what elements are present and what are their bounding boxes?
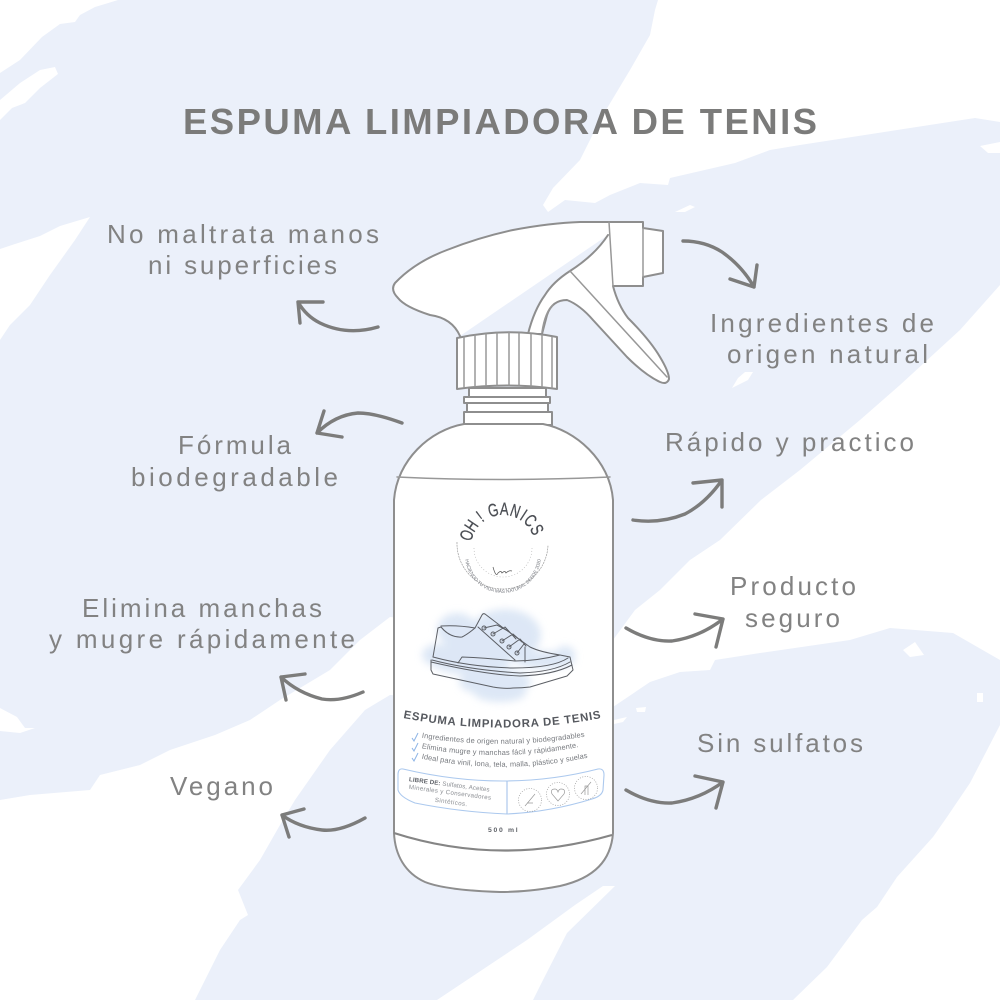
label: fórmula biodegradable: [131, 430, 338, 492]
logo: oh!ganics: !: [473, 508, 488, 526]
libre de box: LIBRE DE: Sulfatos, Aceites: [409, 777, 490, 792]
label: no maltrata manos: [107, 219, 379, 280]
label: producto seguro: [730, 571, 856, 633]
arrow: sin sulfatos: [626, 776, 723, 808]
arrow: no maltrata: [298, 302, 378, 331]
shoe illustration: [431, 614, 573, 688]
label: rápido y practico: Rápido y practico: [665, 427, 914, 457]
logo: oh!ganics: N: [507, 501, 523, 523]
screw cap: [457, 332, 557, 389]
bottle neck: [464, 388, 552, 425]
certification icons: [518, 776, 598, 812]
bottle body: [394, 424, 613, 892]
benefit checklist: Ideal para vinil, lona, tela, malla, plástico y suelas: [422, 754, 588, 768]
benefit checklist: Ingredientes de origen natural y biodegradables: [422, 732, 584, 746]
arrow: rápido: [633, 480, 722, 521]
label: vegano: Vegano: [170, 771, 273, 801]
arrow: vegano: [282, 809, 365, 837]
label: no maltrata manos: No maltrata manos: [107, 219, 379, 249]
label: elimina manchas: [49, 593, 355, 654]
arrow: producto: [626, 614, 723, 647]
label: producto seguro: seguro: [745, 603, 840, 633]
label: ingredientes de origen natural: Ingredientes de: [710, 308, 934, 338]
label: sin sulfatos: Sin sulfatos: [697, 728, 863, 758]
label: no maltrata manos: ni superficies: [148, 250, 337, 280]
logo: oh!ganics: G: [486, 500, 501, 522]
libre de box: Minerales y Conservadores: [409, 784, 491, 800]
product name: ESPUMA LIMPIADORA DE TENIS: [404, 710, 600, 728]
label: fórmula biodegradable: biodegradable: [131, 462, 338, 492]
libre de box: [398, 768, 604, 814]
logo: oh!ganics: H: [461, 517, 483, 536]
check marks: [412, 733, 418, 761]
logo: oh!ganics: I: [516, 507, 530, 525]
sprayer trigger head: [393, 222, 669, 383]
arrow: ingredientes: [683, 241, 757, 287]
label: elimina manchas: y mugre rápidamente: [49, 624, 355, 654]
logo: oh!ganics: [456, 500, 548, 593]
spray bottle: [392, 221, 670, 893]
benefit checklist: [412, 732, 588, 768]
arrow: fórmula: [317, 411, 402, 437]
arrow: elimina: [281, 674, 363, 700]
label: producto seguro: Producto: [730, 571, 856, 601]
watercolor splash: [422, 609, 575, 702]
logo: oh!ganics: HACIENDO TU VIDA MÁS NATURAL DESDE 2020: [465, 559, 541, 593]
volume 500 ml: 500 ml: [488, 827, 519, 834]
logo: oh!ganics: C: [519, 511, 540, 531]
logo: oh!ganics: O: [457, 528, 478, 543]
logo: oh!ganics: S: [525, 522, 547, 538]
label edge lines: [394, 477, 612, 851]
label: elimina manchas: Elimina manchas: [82, 593, 322, 623]
label: fórmula biodegradable: Fórmula: [178, 430, 292, 460]
label: ingredientes de origen natural: origen natural: [727, 339, 928, 369]
title: ESPUMA LIMPIADORA DE TENIS: [183, 101, 817, 142]
libre de box: Sintéticos.: [435, 798, 466, 806]
logo: oh!ganics: A: [500, 500, 509, 520]
label: ingredientes de origen natural: [710, 308, 934, 369]
benefit checklist: Elimina mugre y manchas fácil y rápidamente.: [422, 743, 578, 756]
